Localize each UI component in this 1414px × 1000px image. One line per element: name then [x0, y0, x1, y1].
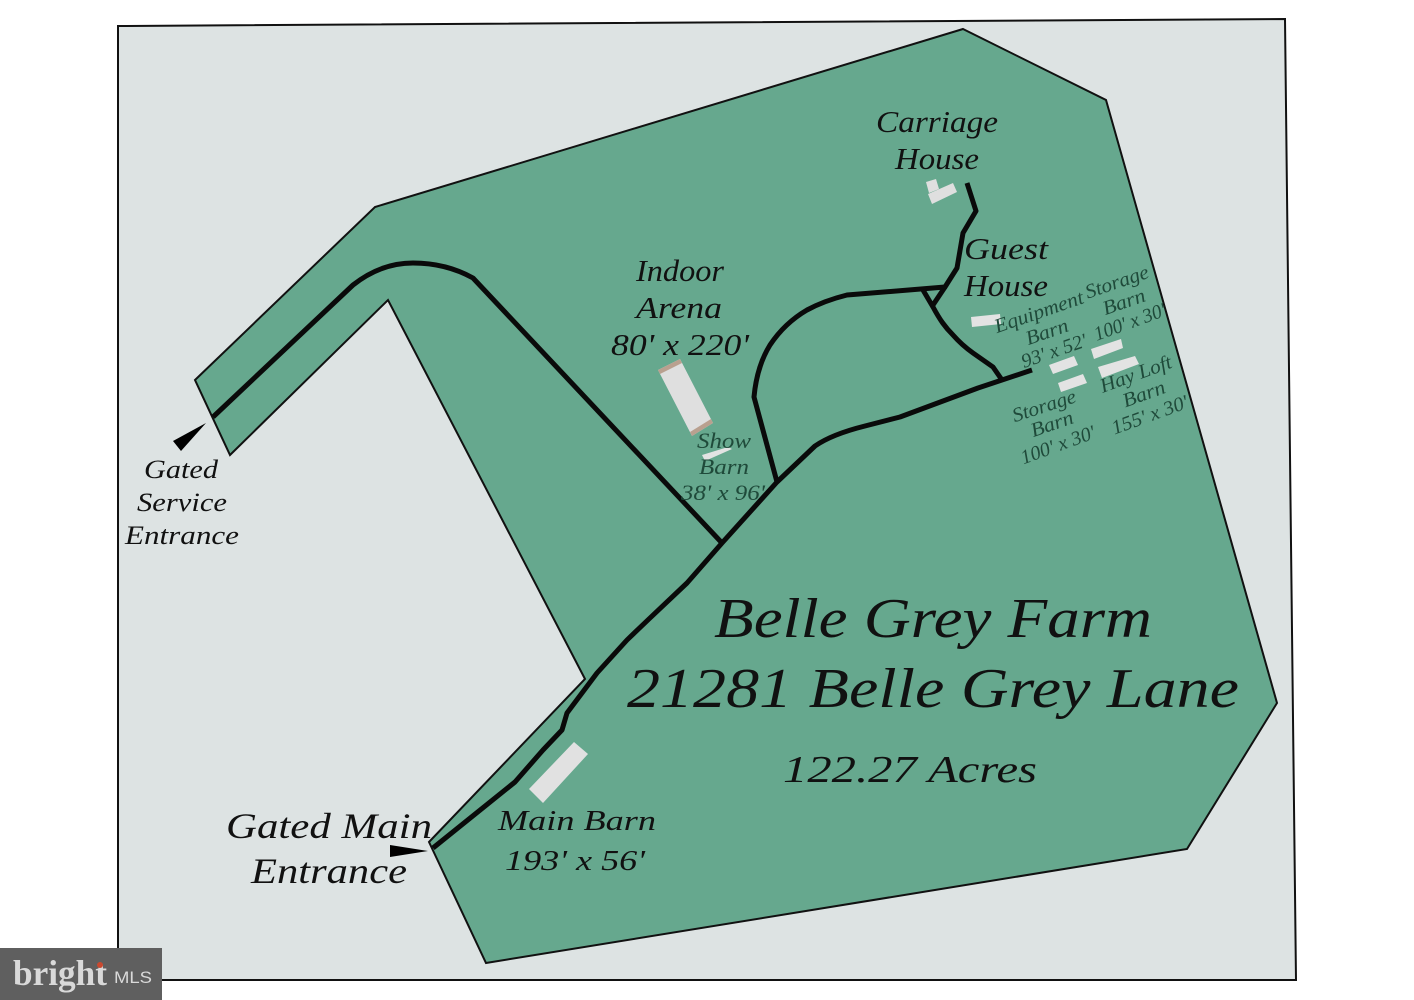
label: main barn: Main Barn: [497, 805, 656, 837]
label: service entrance: Entrance: [124, 521, 239, 550]
label: guest house: House: [963, 268, 1048, 303]
label: service entrance: Gated: [144, 455, 219, 484]
building: indoor arena: [658, 359, 713, 436]
building: equipment barn: [1049, 356, 1078, 374]
label: storage barn upper: Storage: [1082, 261, 1152, 303]
label: equipment barn: 93' x 52': [1018, 330, 1090, 373]
building: storage barn lower: [1058, 374, 1087, 392]
label: hay loft barn: 155' x 30': [1109, 391, 1192, 439]
watermark: bright mls: bright: [13, 953, 107, 993]
label: show barn: Barn: [699, 454, 749, 479]
label: carriage house: [876, 104, 998, 176]
title: Belle Grey Farm: [714, 588, 1152, 650]
label: storage barn upper: [1082, 261, 1170, 346]
arrow: main entrance: [390, 845, 428, 857]
label: carriage house: Carriage: [876, 104, 998, 139]
label: main entrance: [226, 806, 432, 891]
acreage: 122.27 Acres: [783, 749, 1037, 791]
title: [627, 588, 1239, 720]
label: hay loft barn: [1096, 351, 1192, 439]
building: guest house: [971, 314, 1001, 327]
label: main entrance: Gated Main: [226, 806, 432, 846]
label: indoor arena: Arena: [634, 290, 722, 325]
label: show barn: [680, 428, 765, 505]
watermark: bright mls: [0, 948, 162, 1000]
label: carriage house: House: [894, 141, 979, 176]
label: storage barn upper: 100' x 30': [1091, 299, 1170, 346]
building: carriage house: [926, 179, 957, 204]
label: indoor arena: 80' x 220': [611, 327, 751, 362]
label: storage barn upper: Barn: [1100, 285, 1148, 320]
label: main barn: [497, 805, 656, 877]
label: storage barn lower: Storage: [1009, 386, 1079, 427]
title: 21281 Belle Grey Lane: [627, 658, 1239, 720]
label: hay loft barn: Hay Loft: [1096, 351, 1175, 398]
label: equipment barn: [990, 287, 1090, 373]
label: show barn: 38' x 96': [680, 480, 765, 505]
label: storage barn lower: [1009, 386, 1099, 469]
label: storage barn lower: Barn: [1028, 407, 1076, 442]
label: guest house: Guest: [964, 231, 1050, 266]
building: hay loft barn: [1098, 356, 1139, 378]
roads: [213, 183, 1032, 848]
label: guest house: [963, 231, 1050, 303]
building: main barn: [529, 742, 588, 803]
watermark: bright mls: MLS: [114, 968, 152, 987]
label: service entrance: [124, 455, 239, 550]
building: storage barn upper: [1091, 339, 1123, 359]
panel: farm parcel: [195, 29, 1277, 963]
label: hay loft barn: Barn: [1120, 377, 1168, 412]
label: service entrance: Service: [137, 488, 227, 517]
label: storage barn lower: 100' x 30': [1018, 421, 1099, 469]
label: main entrance: Entrance: [250, 851, 407, 891]
label: main barn: 193' x 56': [505, 845, 646, 877]
label: indoor arena: Indoor: [635, 253, 725, 288]
label: equipment barn: Equipment: [990, 287, 1087, 338]
label: indoor arena: [611, 253, 751, 362]
label: show barn: Show: [697, 428, 751, 453]
building: show barn: [702, 447, 732, 461]
label: equipment barn: Barn: [1023, 315, 1071, 350]
arrow: service entrance: [173, 423, 206, 451]
